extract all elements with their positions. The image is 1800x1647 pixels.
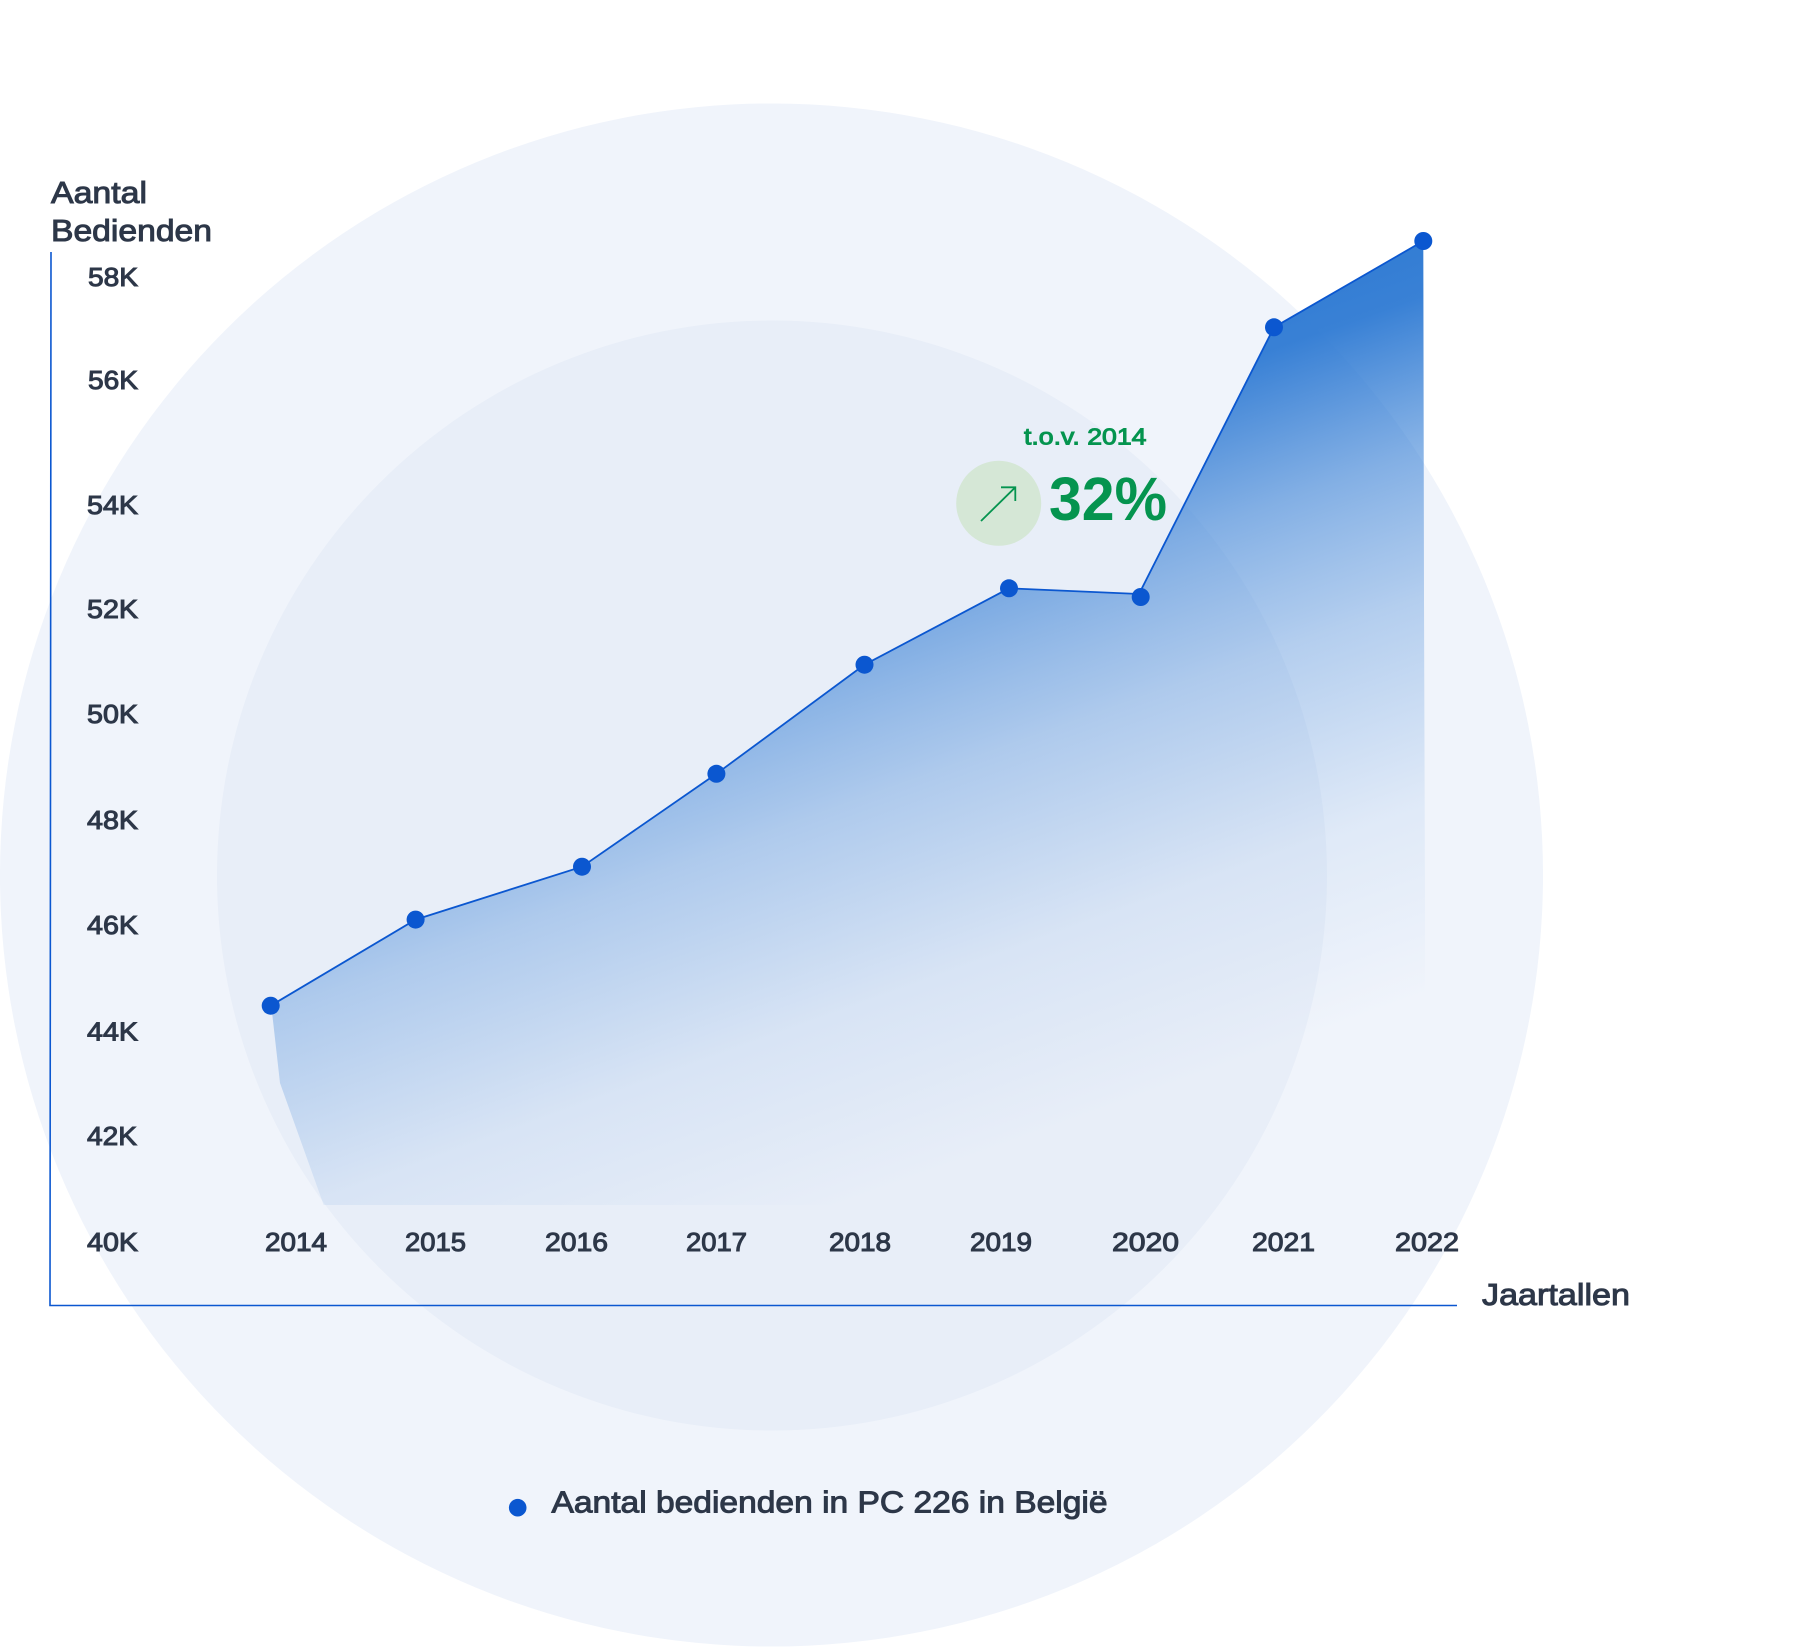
y axis labels: 48K: [87, 807, 138, 835]
legend marker: [509, 1499, 526, 1516]
y axis labels: [87, 264, 138, 1257]
data line: [271, 241, 1423, 1006]
y axis labels: 52K: [87, 596, 138, 624]
y axis labels: 56K: [88, 367, 138, 395]
x axis labels: 2020: [1112, 1229, 1179, 1257]
y axis labels: 58K: [88, 264, 138, 292]
y axis title: Aantal: [51, 175, 147, 210]
legend: [509, 1485, 1108, 1520]
data points: [262, 232, 1432, 1015]
y axis labels: 40K: [87, 1229, 138, 1257]
y axis labels: 42K: [87, 1123, 137, 1151]
y axis labels: 54K: [87, 492, 138, 520]
y axis labels: 50K: [87, 701, 138, 729]
y axis and x axis lines: [50, 252, 1457, 1306]
x axis labels: 2014: [265, 1229, 327, 1257]
callout value: 32%: [1049, 465, 1167, 533]
x axis labels: 2018: [829, 1229, 891, 1257]
x axis labels: 2017: [686, 1229, 747, 1257]
y axis title: [51, 175, 212, 248]
callout caption: t.o.v. 2014: [1024, 424, 1146, 450]
y axis labels: 46K: [87, 912, 138, 940]
inner background circle: [217, 320, 1327, 1430]
legend label: Aantal bedienden in PC 226 in België: [552, 1485, 1108, 1520]
icon: upward arrow in circle: [956, 461, 1041, 546]
x axis labels: 2021: [1252, 1229, 1315, 1257]
x axis title: Jaartallen: [1482, 1277, 1630, 1312]
x axis labels: 2019: [970, 1229, 1032, 1257]
x axis labels: 2022: [1395, 1229, 1459, 1257]
callout: 32% increase versus 2014: [956, 424, 1167, 546]
x axis labels: 2016: [545, 1229, 608, 1257]
y axis title: Bedienden: [51, 213, 212, 248]
y axis labels: 44K: [87, 1018, 138, 1046]
area fill under line: [271, 241, 1426, 1205]
x axis labels: [265, 1229, 1459, 1257]
x axis labels: 2015: [405, 1229, 466, 1257]
